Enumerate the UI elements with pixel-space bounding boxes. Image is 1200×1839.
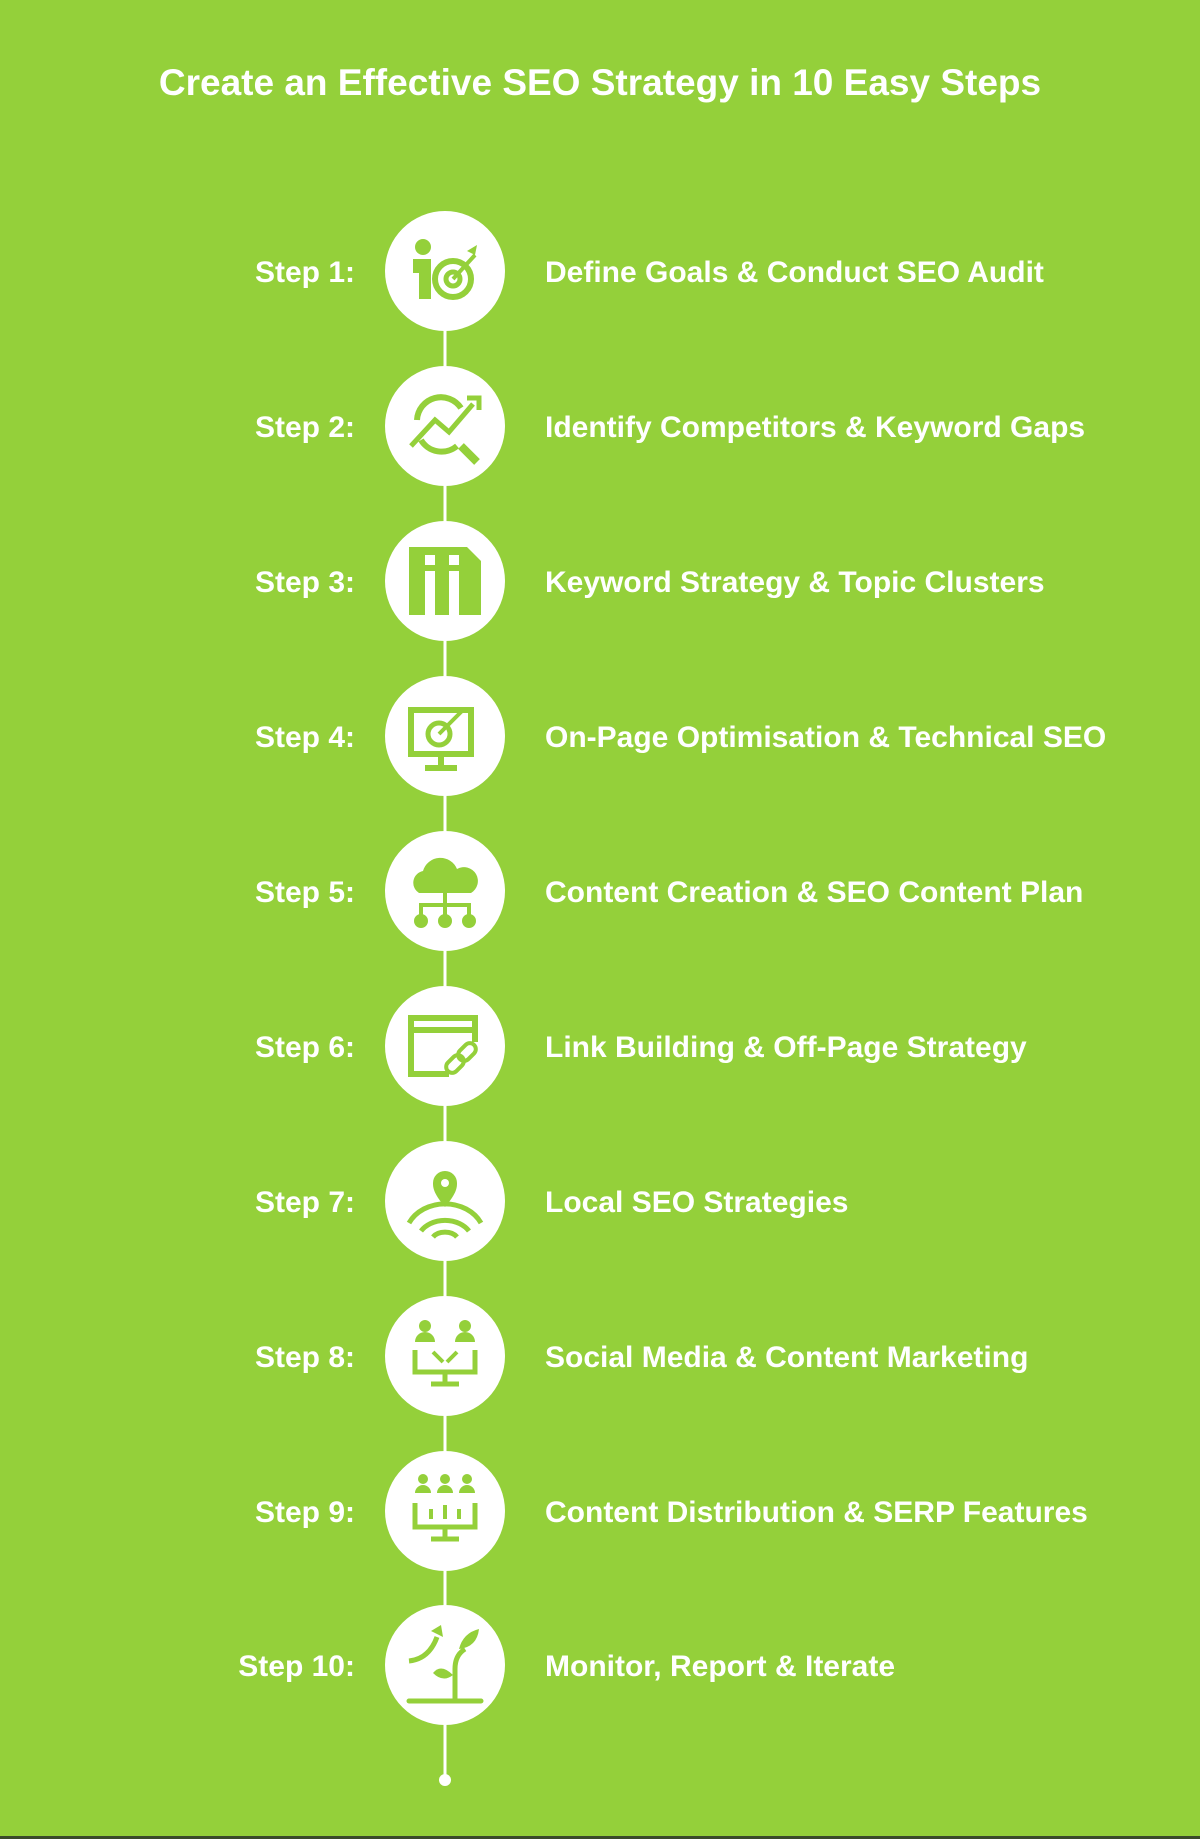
- step 4: On-Page Optimisation & Technical SEO: [545, 721, 1106, 754]
- step 7: Step 7:: [255, 1186, 355, 1219]
- step 10: [238, 1605, 895, 1725]
- step 5: Step 5:: [255, 876, 355, 909]
- step 2: [255, 366, 1085, 486]
- step 2: Identify Competitors & Keyword Gaps: [545, 411, 1085, 444]
- step 7: Local SEO Strategies: [545, 1186, 848, 1219]
- icon: search chart: [411, 397, 479, 462]
- step 6: Step 6:: [255, 1031, 355, 1064]
- step 9: Step 9:: [255, 1496, 355, 1529]
- step 1: Step 1:: [255, 256, 355, 289]
- step 4: Step 4:: [255, 721, 355, 754]
- icon: growth plant: [409, 1625, 481, 1701]
- icon: social monitor: [415, 1320, 475, 1384]
- timeline line: [439, 271, 451, 1786]
- step 9: Content Distribution & SERP Features: [545, 1496, 1088, 1529]
- icon: location: [409, 1171, 481, 1237]
- step 3: [255, 521, 1045, 641]
- icon: cloud network: [413, 858, 478, 926]
- step 3: Keyword Strategy & Topic Clusters: [545, 566, 1045, 599]
- icon: monitor target: [411, 710, 471, 768]
- step 1: [255, 211, 1044, 331]
- step 4: [255, 676, 1106, 796]
- step 8: [255, 1296, 1028, 1416]
- step 5: [255, 831, 1083, 951]
- icon: distribution: [415, 1474, 475, 1539]
- step 10: Monitor, Report & Iterate: [545, 1650, 895, 1683]
- step 2: Step 2:: [255, 411, 355, 444]
- step 8: Step 8:: [255, 1341, 355, 1374]
- step 6: Link Building & Off-Page Strategy: [545, 1031, 1027, 1064]
- step 7: [255, 1141, 848, 1261]
- step 5: Content Creation & SEO Content Plan: [545, 876, 1083, 909]
- step 6: [255, 986, 1027, 1106]
- step 3: Step 3:: [255, 566, 355, 599]
- icon: person with target: [413, 239, 477, 299]
- step 10: Step 10:: [238, 1650, 355, 1683]
- step 9: [255, 1451, 1088, 1571]
- step 1: Define Goals & Conduct SEO Audit: [545, 256, 1044, 289]
- icon: browser link: [411, 1018, 478, 1075]
- title: Create an Effective SEO Strategy in 10 Easy Steps: [159, 62, 1041, 103]
- icon: clusters: [409, 547, 481, 615]
- step 8: Social Media & Content Marketing: [545, 1341, 1028, 1374]
